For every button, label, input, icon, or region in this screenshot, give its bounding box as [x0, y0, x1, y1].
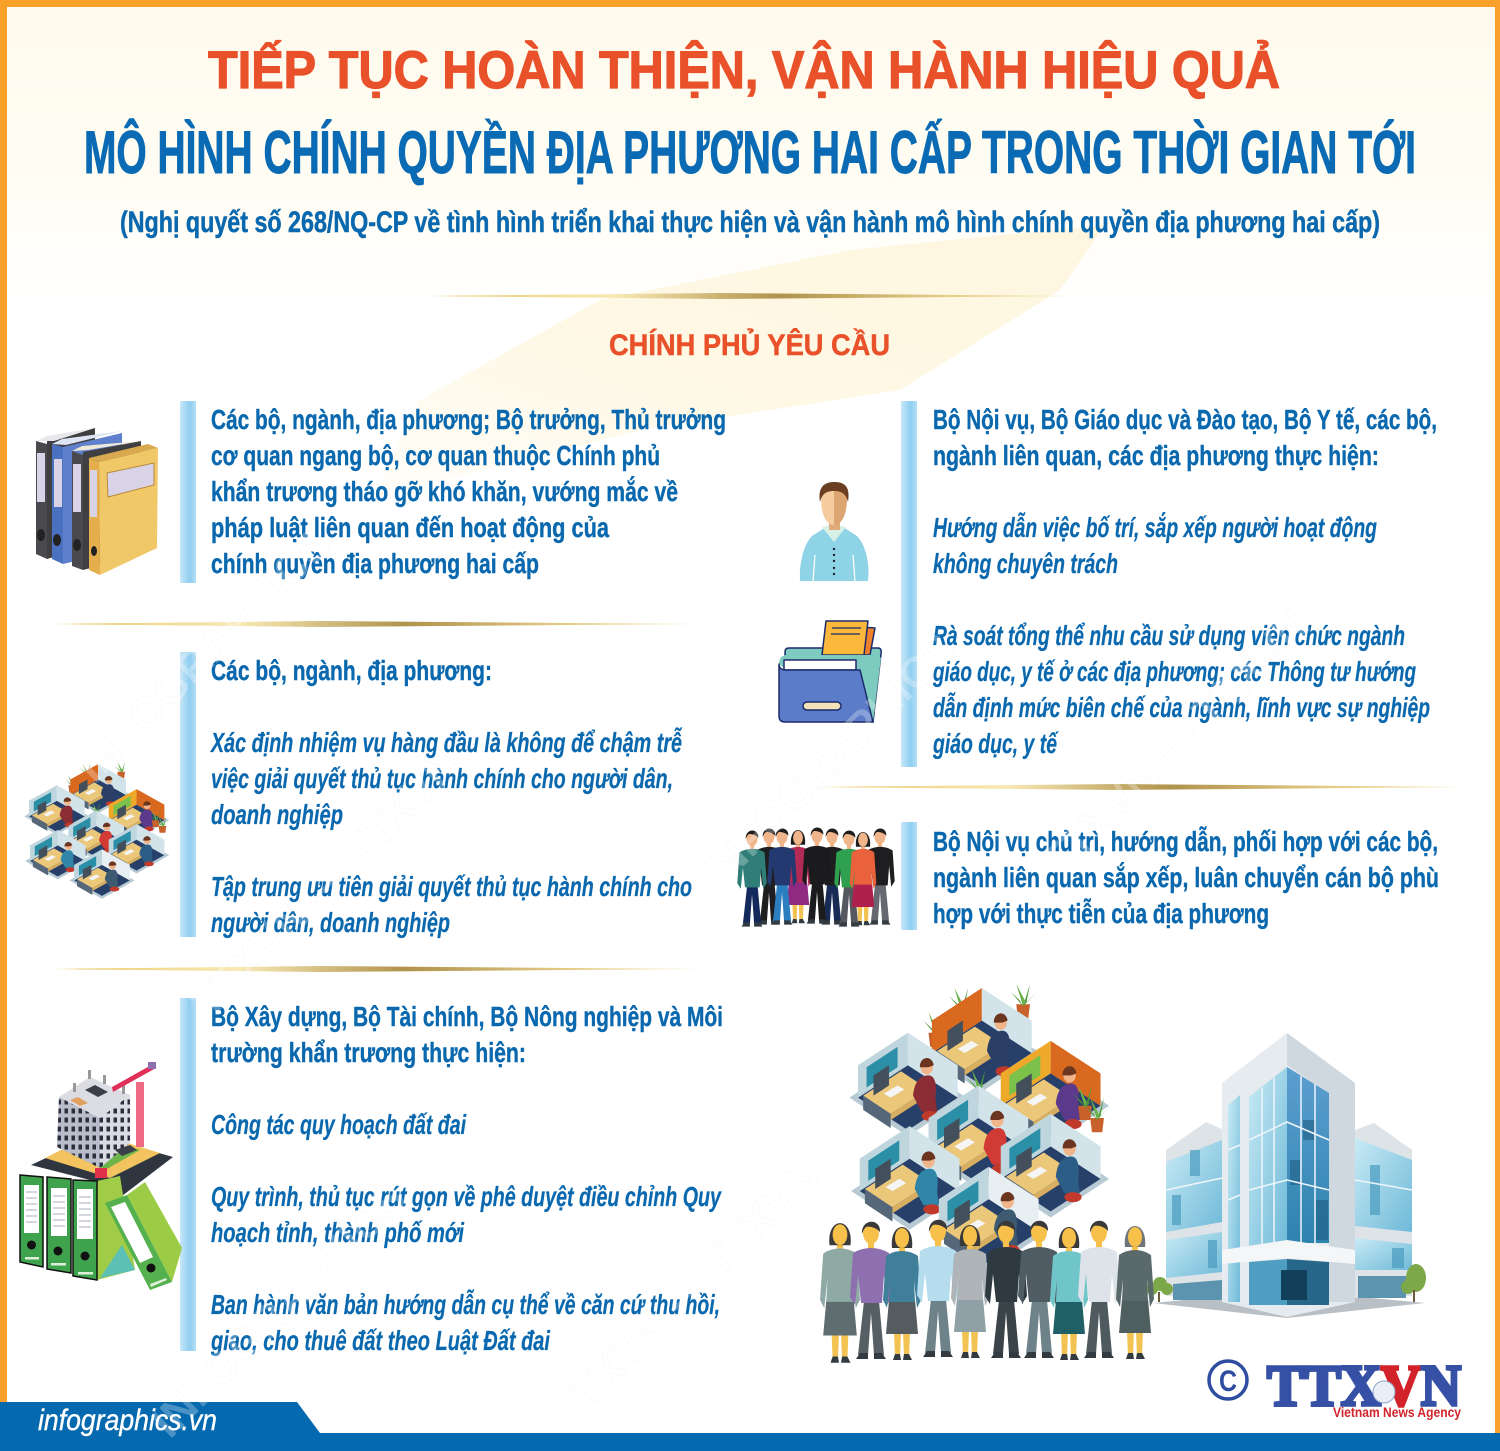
panel: block 2 text with accent bar: doanh nghiệp [211, 799, 343, 830]
panel: block 2 text with accent bar: người dân, doanh nghiệp [211, 907, 450, 938]
icon: blue folder [779, 621, 881, 722]
panel: right block 1 text with accent bar [901, 401, 1437, 767]
panel: block 1 text with accent bar: pháp luật liên quan đến hoạt động của [211, 512, 609, 543]
panel: right block 2 text with accent bar: hợp với thực tiễn của địa phương [933, 898, 1269, 929]
section heading: CHÍNH PHỦ YÊU CẦU [609, 328, 890, 362]
panel: block 2 text with accent bar: Tập trung ưu tiên giải quyết thủ tục hành chính cho [211, 871, 692, 902]
panel: block 2 text with accent bar: Các bộ, ngành, địa phương: [211, 655, 492, 686]
footer band: infographics.vn [38, 1404, 217, 1437]
panel: block 2 text with accent bar: việc giải quyết thủ tục hành chính cho người dân, [211, 763, 673, 794]
panel: block 3 text with accent bar: Bộ Xây dựng, Bộ Tài chính, Bộ Nông nghiệp và Môi [211, 1001, 723, 1032]
watermark: TTXVN — TTXVN [1032, 600, 1319, 887]
illustration: group of staff [820, 1220, 1154, 1363]
icon: isometric office small [24, 762, 170, 899]
panel: block 1 text with accent bar [180, 401, 726, 583]
panel: right block 1 text with accent bar: không chuyên trách [933, 548, 1118, 579]
icon: ring binders [36, 428, 158, 575]
panel: block 2 text with accent bar: Xác định nhiệm vụ hàng đầu là không để chậm trễ [210, 727, 682, 758]
panel: block 1 text with accent bar: chính quyền địa phương hai cấp [211, 548, 539, 579]
panel: block 3 text with accent bar: Quy trình, thủ tục rút gọn về phê duyệt điều chỉnh Quy [211, 1181, 722, 1212]
logo: TTXVN: TTXVN [1267, 1353, 1461, 1418]
logo: TTXVN: C [1219, 1365, 1237, 1398]
panel: block 3 text with accent bar: giao, cho thuê đất theo Luật Đất đai [210, 1325, 551, 1356]
watermark: INFOGRAPHICS [692, 624, 966, 897]
icon: person [800, 482, 869, 581]
footer band [0, 1402, 1500, 1451]
panel: block 3 text with accent bar [180, 998, 723, 1356]
title line 1: TIẾP TỤC HOÀN THIỆN, VẬN HÀNH HIỆU QUẢ [208, 39, 1280, 100]
panel: right block 2 text with accent bar [901, 822, 1439, 930]
logo: TTXVN: Vietnam News Agency [1333, 1404, 1461, 1420]
watermark: TTXVN — TTXVN [182, 740, 469, 1027]
panel: block 3 text with accent bar: trường khẩn trương thực hiện: [211, 1037, 526, 1068]
watermark: INFOGRAPHICS [67, 519, 341, 792]
watermark: INFOGRAPHICS [142, 1174, 416, 1447]
panel: block 1 text with accent bar: khẩn trương tháo gỡ khó khăn, vướng mắc về [211, 476, 678, 507]
panel: right block 1 text with accent bar: giáo dục, y tế [932, 728, 1059, 759]
panel: block 2 text with accent bar [180, 652, 692, 938]
panel: block 1 text with accent bar: cơ quan ngang bộ, cơ quan thuộc Chính phủ [211, 440, 660, 471]
illustration: office building [1146, 1033, 1426, 1318]
illustration: isometric office large [849, 984, 1111, 1270]
watermark [67, 519, 1319, 1447]
panel: block 3 text with accent bar: Ban hành văn bản hướng dẫn cụ thể về căn cứ thu hồi, [211, 1289, 720, 1320]
panel: block 3 text with accent bar: Công tác quy hoạch đất đai [211, 1109, 467, 1140]
watermark: TTXVN — TTXVN [542, 1150, 829, 1437]
icon: crowd of people [737, 828, 895, 927]
panel: block 3 text with accent bar: hoạch tỉnh, thành phố mới [211, 1217, 465, 1248]
icon: construction site and green binders [20, 1062, 182, 1290]
panel: block 1 text with accent bar: Các bộ, ngành, địa phương; Bộ trưởng, Thủ trưởng [211, 404, 726, 435]
